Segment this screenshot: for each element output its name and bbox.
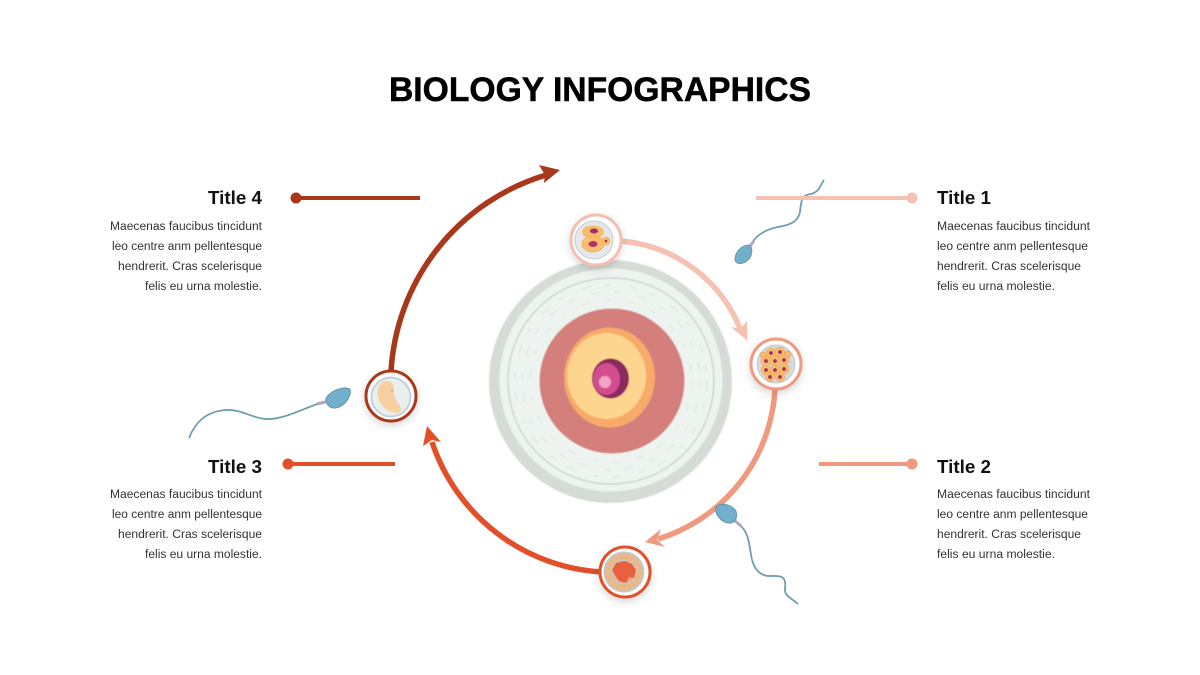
node 4: embryo [366,371,416,421]
arrow: arc to stage 2 [620,241,748,341]
sperm: top right [735,180,824,264]
text block: title 3: leo centre anm pellentesque [112,509,262,521]
text block: title 4: Title 4 [208,188,262,208]
text block: title 1: Maecenas faucibus tincidunt [937,221,1091,233]
node 3: blastocyst [600,547,650,597]
text block: title 1 [937,188,1091,293]
connector: title 3 [282,458,395,470]
text block: title 3: felis eu urna molestie. [145,549,262,561]
sperm: bottom right [716,504,798,604]
node 2: morula [751,339,801,389]
text block: title 2: leo centre anm pellentesque [937,509,1088,521]
text block: title 3: hendrerit. Cras scelerisque [118,529,262,541]
text block: title 4: hendrerit. Cras scelerisque [118,261,262,273]
arrow: arc outward [391,165,560,372]
connector: title 1 [756,192,918,204]
text block: title 4: Maecenas faucibus tincidunt [110,221,263,233]
text block: title 4: felis eu urna molestie. [145,281,262,293]
text block: title 1: hendrerit. Cras scelerisque [937,261,1081,273]
text block: title 1: felis eu urna molestie. [937,281,1055,293]
connector: title 2 [819,458,918,470]
text block: title 2 [937,457,1091,561]
text block: title 1: leo centre anm pellentesque [937,241,1088,253]
text block: title 2: Maecenas faucibus tincidunt [937,489,1091,501]
text block: title 3: Title 3 [208,457,262,477]
text block: title 4 [110,188,263,293]
text block: title 3 [110,457,263,561]
arrow: arc to stage 3 [645,388,775,547]
text block: title 2: felis eu urna molestie. [937,549,1055,561]
text block: title 2: Title 2 [937,457,991,477]
text block: title 3: Maecenas faucibus tincidunt [110,489,263,501]
sperm: left [189,388,350,438]
title: BIOLOGY INFOGRAPHICS [389,71,811,109]
arrow: arc to stage 4 [423,426,603,572]
node 1: two-cell stage [571,215,621,265]
connector: title 4 [290,192,420,204]
text block: title 2: hendrerit. Cras scelerisque [937,529,1081,541]
text block: title 1: Title 1 [937,188,991,208]
text block: title 4: leo centre anm pellentesque [112,241,262,253]
central egg cell [489,260,732,503]
